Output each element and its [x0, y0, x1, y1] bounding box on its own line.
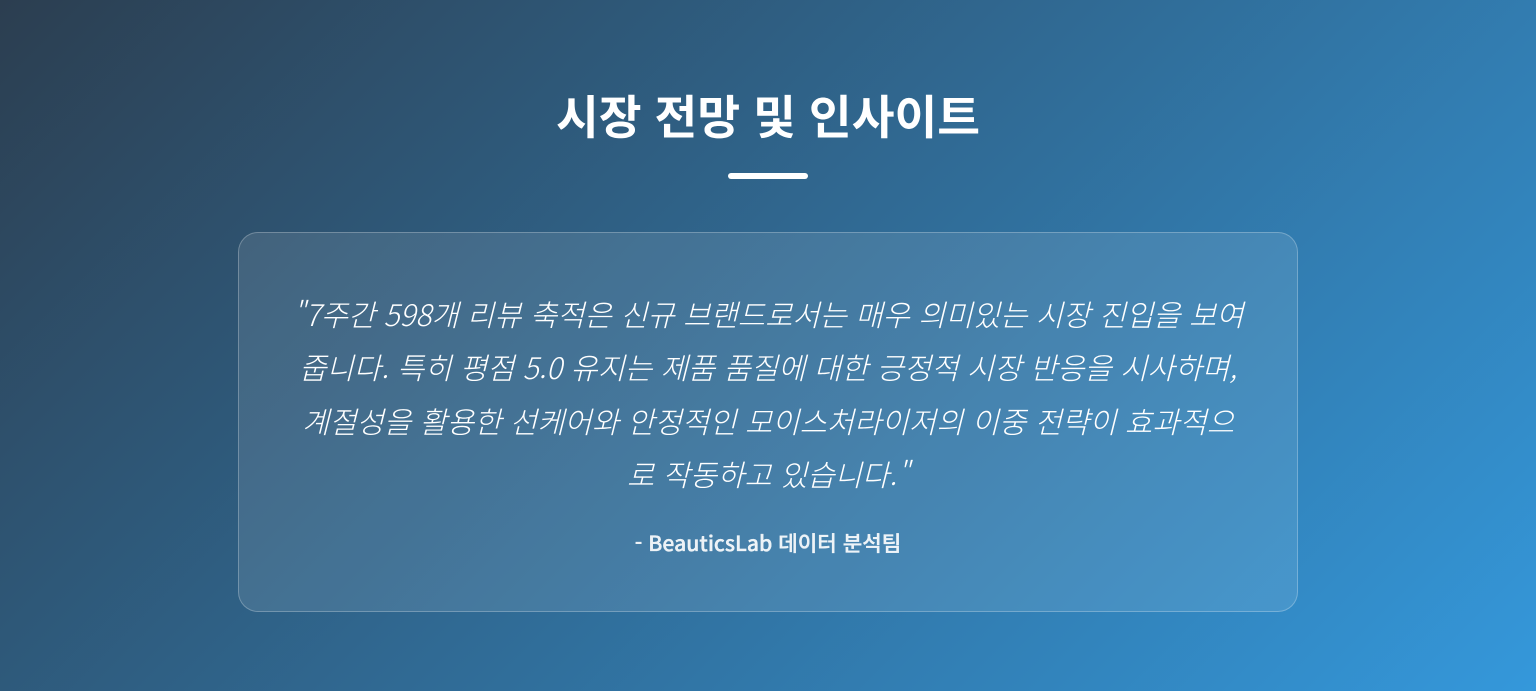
quote text: 줍니다. 특히 평점 5.0 유지는 제품 품질에 대한 긍정적 시장 반응을 시사하며,	[299, 345, 1237, 388]
panel: quote card	[238, 232, 1298, 612]
title: 시장 전망 및 인사이트	[556, 81, 980, 148]
quote text: "7주간 598개 리뷰 축적은 신규 브랜드로서는 매우 의미있는 시장 진입을 보여	[292, 292, 1244, 335]
title underline	[728, 173, 808, 179]
quote text	[292, 292, 1246, 495]
quote attribution: - BeauticsLab 데이터 분석팀	[635, 527, 901, 558]
quote text: 로 작동하고 있습니다."	[627, 452, 909, 495]
quote text: 계절성을 활용한 선케어와 안정적인 모이스처라이저의 이중 전략이 효과적으	[302, 399, 1234, 442]
